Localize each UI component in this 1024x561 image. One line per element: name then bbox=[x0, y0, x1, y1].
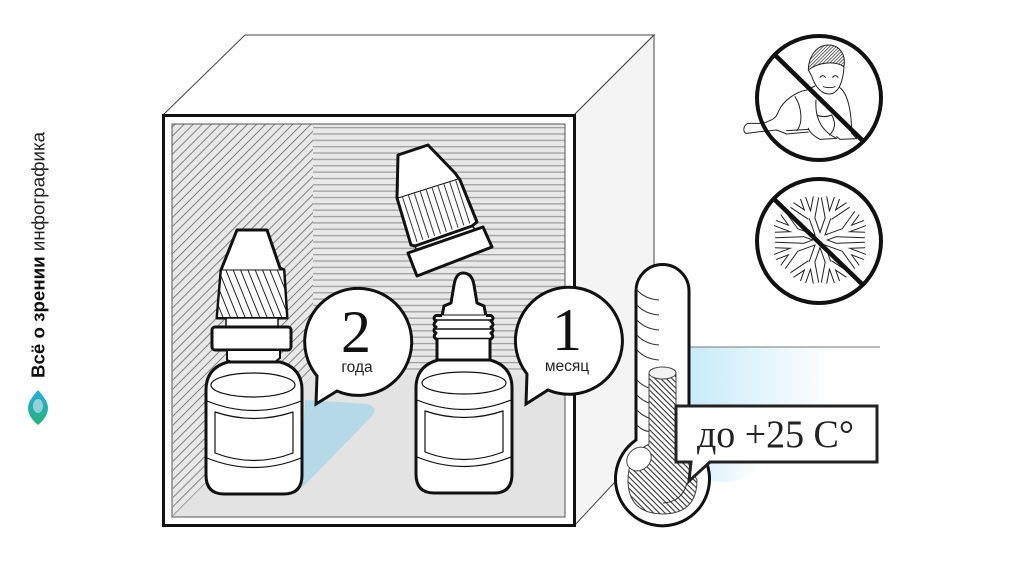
bottle: closed, 2 years bbox=[206, 230, 302, 494]
callout: temperature: до +25 C° bbox=[697, 413, 854, 456]
hair bbox=[808, 45, 844, 70]
snowflake bbox=[775, 197, 865, 283]
bubble: 1 месяц: 1 bbox=[552, 297, 582, 363]
bottle cap ribbed bbox=[217, 230, 287, 318]
collar bbox=[212, 327, 291, 350]
bottle: open, 1 month bbox=[416, 273, 512, 493]
bubble: 2 года: года bbox=[341, 359, 373, 376]
bubble: 2 года bbox=[305, 288, 412, 404]
cap: floating, removed bbox=[397, 145, 492, 276]
bubble: 2 года: 2 bbox=[341, 299, 371, 365]
icon: no babies bbox=[744, 36, 881, 160]
neck bbox=[226, 318, 278, 328]
icon: logo bbox=[28, 390, 48, 425]
brand text: Всё о зрении инфографика bbox=[28, 131, 48, 378]
bubble: 1 месяц: месяц bbox=[545, 358, 589, 375]
baby bbox=[744, 45, 857, 139]
shoulder bbox=[227, 350, 280, 362]
thermometer bbox=[616, 264, 709, 526]
bulb highlight bbox=[622, 442, 656, 476]
icon: no freezing bbox=[757, 179, 881, 303]
mercury column bbox=[628, 374, 697, 514]
bottle body bbox=[206, 362, 302, 494]
box: top face and side face bbox=[163, 35, 654, 526]
body details bbox=[207, 373, 301, 468]
panel: box interior bbox=[164, 116, 574, 526]
floating cap collar bbox=[408, 227, 492, 276]
scale ticks bbox=[637, 290, 659, 432]
body details bbox=[417, 372, 511, 466]
floating cap hatch bbox=[400, 180, 474, 243]
cap edge bbox=[221, 269, 284, 271]
head bbox=[808, 67, 844, 94]
thread lines bbox=[436, 320, 491, 338]
bottle body bbox=[416, 360, 512, 493]
mercury top bbox=[649, 367, 676, 379]
dropper tip bbox=[442, 273, 486, 316]
cap hatch bbox=[218, 270, 286, 317]
floating cap link bbox=[415, 226, 478, 254]
floating cap edge bbox=[398, 179, 458, 198]
threaded neck bbox=[434, 316, 493, 360]
shadow: blue bbox=[300, 400, 374, 488]
bubble: 1 месяц bbox=[515, 287, 622, 404]
callout: temperature bbox=[676, 406, 877, 481]
room temperature glow and line bbox=[689, 347, 880, 482]
